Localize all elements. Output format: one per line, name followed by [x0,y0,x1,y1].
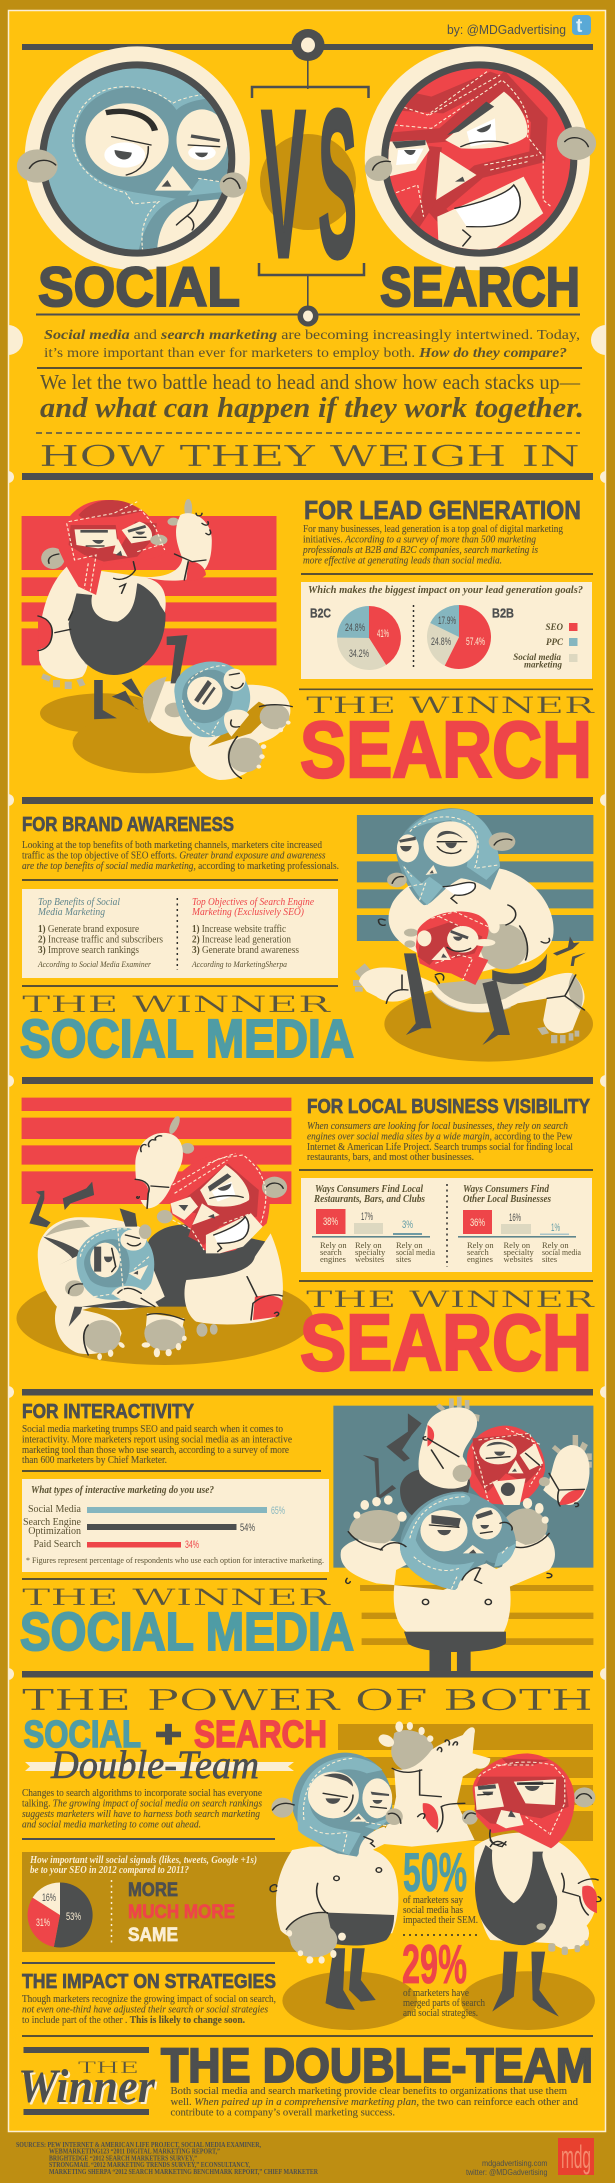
card: bar chart: 65% [271,1505,285,1517]
bar: social media [87,1507,267,1513]
bar: paid search [87,1542,181,1548]
tagline [40,370,584,424]
illustration: interactivity wrestlers [333,1397,593,1672]
chart: other local businesses: search [467,1247,489,1257]
illustration: brand awareness wrestlers [353,808,593,1062]
winner label: THE WINNER [306,1288,597,1313]
pie: B2B [427,605,491,669]
tagline: and what can happen if they work together. [40,392,584,424]
panel: for local business visibility [299,1096,597,1387]
panel: double-team intro [22,1714,327,1840]
chart: other local businesses: Ways Consumers Find [463,1184,550,1195]
section bar [22,797,593,804]
chart: other local businesses: specialty [504,1247,534,1257]
heading: FOR BRAND AWARENESS [22,814,234,836]
chart: other local businesses: engines [467,1254,493,1264]
winner badge: Winner [20,2062,158,2115]
chart: restaurants, bars, clubs: 38% [323,1216,338,1228]
card: bar chart: Paid Search [34,1539,81,1550]
column: search objectives: According to MarketingSherpa [191,959,287,969]
column: search objectives: Top Objectives of Search Engine [192,897,314,908]
heading: search: SEARCH [380,255,580,318]
chart: restaurants, bars, clubs: websites [355,1254,384,1264]
pie: signals: 31% [36,1917,50,1929]
logo: mdg [558,2138,594,2175]
dotted divider [403,1934,478,1936]
pie: signals [28,1882,93,1947]
illustration: lead generation wrestlers [22,499,292,780]
panel: the winner double-team [18,2040,593,2118]
pie: B2C [337,606,401,670]
body text: talking. The growing impact of social media on search rankings [22,1798,262,1810]
column: search objectives: 2) Increase lead generation [192,934,292,946]
section bar [22,1077,593,1084]
chart: other local businesses: social media [542,1247,581,1257]
body text [307,1121,573,1163]
panel: social signals: be to your SEO in 2012 compared to 2011? [30,1865,189,1876]
icon: twitter [572,15,591,37]
legend: marketing [524,660,562,670]
body text: restaurants, bars, and most other businesses. [307,1152,474,1163]
panel: for lead generation [299,495,597,794]
chart: other local businesses: Rely on [542,1240,569,1250]
card: bar chart: * Figures represent percentage of respondents who use each option for interactive marketing. [26,1556,324,1565]
chart: other local businesses: Rely on [467,1240,494,1250]
card: benefits and objectives [22,889,338,978]
chart: restaurants, bars, clubs: engines [320,1254,346,1264]
panel: social signals [22,1852,297,1952]
column: social benefits: 1) Generate brand exposure [38,924,139,935]
VS mark: V [261,65,306,302]
card: pie charts: B2C [310,606,331,620]
card: pie charts: B2B [492,606,514,620]
pie: B2B: 17.9% [438,615,456,627]
stat: 50 percent: of marketers say [403,1895,464,1906]
body text: are the top benefits of social media marketing, according to marketing professionals. [22,861,339,872]
winner label: THE WINNER [306,694,597,719]
chart: restaurants, bars, clubs: 17% [361,1211,373,1223]
body text [22,1994,276,2026]
chart: restaurants, bars, clubs: Rely on [355,1240,382,1250]
section bar [22,473,593,480]
chart: restaurants, bars, clubs: Restaurants, Bars, and Clubs [313,1194,425,1205]
panel: for interactivity [20,1401,354,1662]
column: social benefits: According to Social Media Examiner [37,959,152,969]
column: social benefits: Media Marketing [37,907,105,918]
card: bar chart: Optimization [28,1526,81,1537]
winner badge: Winner [18,2060,156,2113]
heading: social plus search: + [155,1714,182,1756]
column: social benefits: 2) Increase traffic and subscribers [38,934,163,946]
body text: Changes to search algorithms to incorporate social has everyone [22,1788,262,1799]
pie: B2C: 34.2% [349,648,369,660]
column: search objectives: Marketing (Exclusively SEO) [191,907,304,918]
legend: much more: MUCH MORE [128,1902,235,1923]
stat: 29 percent [402,1933,486,2019]
chart: other local businesses: 1% [551,1222,560,1234]
chart: restaurants, bars, clubs: specialty [355,1247,386,1257]
footer: contact: mdgadvertising.com [482,2158,548,2168]
chart: restaurants, bars, clubs: sites [396,1254,411,1264]
winner badge: THE [78,2058,139,2077]
section bar [22,1389,593,1396]
body text: traffic as the top objective of SEO efforts. Greater brand exposure and awareness [22,850,326,862]
winner name: SOCIAL MEDIA [20,1602,354,1662]
footer: contact [466,2158,548,2177]
body text: engines over social media sites by a wide margin, according to the Pew [307,1132,573,1142]
chart: restaurants, bars, clubs [312,1184,435,1264]
chart: other local businesses [458,1184,581,1264]
panel: impact on strategies [22,1962,276,2026]
card: pie charts: Which makes the biggest impact on your lead generation goals? [308,584,583,596]
heading: social plus search: SEARCH [194,1714,327,1756]
intro paragraph: it’s more important than ever for marketers to employ both. How do they compare? [44,346,567,361]
winner label: THE WINNER [22,1586,333,1611]
pie: B2C: 41% [377,628,389,640]
body text: than 600 marketers by Chief Marketer. [22,1455,167,1466]
column: social benefits: 3) Improve search rankings [38,945,139,956]
footer: sources: SOURCES: PEW INTERNET & AMERICAN LIFE PROJECT, SOCIAL MEDIA EXAMINER, [16,2141,261,2149]
dashed divider [36,432,580,434]
legend: SEO [545,622,563,632]
portrait: search wrestler [365,46,596,270]
chart: other local businesses: sites [542,1254,557,1264]
stat: 29 percent: merged parts of search [403,1998,486,2009]
pie: B2B: 24.8% [431,636,451,648]
card: bar chart: Search Engine [23,1517,82,1528]
column: search objectives: 1) Increase website traffic [192,924,286,935]
heading: THE DOUBLE-TEAM [161,2040,593,2093]
chart: restaurants, bars, clubs: Rely on [396,1240,423,1250]
bullet ornament bottom [36,275,580,326]
text: S [318,65,357,302]
script title: Double-Team [50,1742,259,1787]
footer: sources: WEBMARKETING123 “2011 DIGITAL MARKETING REPORT,” [49,2148,220,2156]
legend: same: SAME [128,1925,178,1946]
column: search objectives: 3) Generate brand awareness [192,945,299,956]
legend: Social media [513,652,561,662]
stripes: power of both [338,1724,593,1841]
legend [513,622,578,670]
footer: sources: MARKETING SHERPA “2012 SEARCH MARKETING BENCHMARK REPORT,” CHIEF MARKETER [49,2168,319,2176]
illustration: double-team wrestlers [270,1721,601,2030]
portrait: social wrestler [17,46,250,270]
footer: sources: STRONGMAIL “2012 MARKETING TRENDS SURVEY,” ECONSULTANCY, [49,2161,250,2169]
chart: restaurants, bars, clubs: Ways Consumers Find Local [315,1184,423,1195]
chart: other local businesses: 16% [509,1212,521,1224]
heading: how they weigh in: HOW THEY WEIGH IN [39,439,580,473]
body text: Social media marketing trumps SEO and paid search when it comes to [22,1424,283,1435]
body text [170,2086,579,2118]
body text [22,1424,292,1466]
card: bar chart: 34% [185,1539,199,1551]
heading: the power of both: THE POWER OF BOTH [22,1683,593,1717]
footer: sources [16,2141,319,2176]
body text: marketing tool than those who use search, according to a survey of more [22,1445,289,1456]
footer: sources: BRIGHTEDGE “2012 SEARCH MARKETERS SURVEY,” [49,2154,197,2162]
pie: signals: 16% [42,1892,56,1904]
stat: 50 percent: social media has [403,1905,463,1916]
column: social benefits: Top Benefits of Social [38,897,120,908]
card: pie charts [301,582,592,679]
chart: other local businesses: websites [504,1254,533,1264]
intro paragraph: Social media and search marketing are becoming increasingly intertwined. Today, [44,328,580,343]
body text: more effective at generating leads than social media. [303,556,502,566]
body text: Both social media and search marketing provide clear benefits to organizations that use them [170,2086,567,2097]
intro paragraph [44,328,580,361]
body text: suggests marketers will have to harness both search marketing [22,1809,260,1820]
body text: When consumers are looking for local businesses, they rely on search [307,1121,568,1132]
illustration: local business wrestlers [16,1098,313,1365]
body text: not even one-third have adjusted their search or social strategies [22,2004,268,2016]
pie: B2C: 24.8% [345,622,365,634]
divider [37,367,582,369]
column: search objectives [191,897,314,969]
byline: by: @MDGadvertising [447,22,566,37]
card: bar chart [22,1479,329,1572]
body text: contribute to a company’s overall marketing success. [170,2108,395,2118]
panel: for brand awareness [20,814,354,1069]
bullet ornament top [292,29,324,89]
divider [22,2035,593,2037]
chart: other local businesses: Rely on [504,1240,531,1250]
body text: well. When paired up in a comprehensive marketing plan, the two can reinforce each other and [170,2097,579,2108]
heading: FOR INTERACTIVITY [22,1401,195,1423]
legend: more: MORE [128,1880,178,1901]
section bar [22,1671,593,1678]
body text: For many businesses, lead generation is a top goal of digital marketing [303,524,564,535]
body text [22,840,339,872]
body text: professionals at B2B and B2C companies, search marketing is [302,545,538,556]
body text: initiatives. According to a survey of more than 500 marketing [303,534,536,546]
stat: 50 percent: impacted their SEM. [403,1915,478,1926]
chart: other local businesses: 36% [470,1217,485,1229]
winner name: SOCIAL MEDIA [20,1009,354,1069]
icon: twitter: t [576,16,583,37]
winner label: THE WINNER [22,993,333,1018]
chart: restaurants, bars, clubs: social media [396,1247,435,1257]
body text: to include part of the other . This is likely to change soon. [22,2015,245,2026]
edge notches [0,325,615,1680]
heading: THE IMPACT ON STRATEGIES [22,1971,276,1993]
footer: contact: twitter: @MDGadvertising [466,2167,548,2177]
dotted divider [412,605,414,668]
stat: 29 percent: and social strategies. [403,2008,478,2019]
bar: SEO [87,1524,236,1530]
legend: PPC [546,637,564,647]
stat: 29 percent: 29% [402,1933,467,1995]
body text: Though marketers recognize the growing impact of social on search, [22,1994,276,2005]
stat: 50 percent [403,1841,478,1926]
heading: FOR LEAD GENERATION [304,495,581,525]
stat: 50 percent: 50% [403,1841,467,1903]
card: bar charts [301,1178,592,1272]
heading: social plus search: SOCIAL [24,1714,141,1756]
body text: interactivity. More marketers report using social media as an interactive [22,1434,292,1446]
tagline: We let the two battle head to head and show how each stacks up— [40,370,581,394]
pie: B2B: 57.4% [466,636,485,648]
chart: restaurants, bars, clubs: search [320,1247,342,1257]
ribbon [25,1762,294,1771]
card: bar chart: What types of interactive marketing do you use? [31,1485,214,1496]
heading: social: SOCIAL [38,255,240,318]
chart: restaurants, bars, clubs: 3% [402,1219,413,1231]
body text: Internet & American Life Project. Search trumps social for finding local [307,1142,573,1153]
body text: Looking at the top benefits of both marketing channels, marketers cite increased [22,840,323,851]
body text: and social media marketing to come out ahead. [22,1820,201,1830]
pie: signals: 53% [66,1911,81,1923]
column: social benefits [37,897,163,969]
body text [22,1788,262,1830]
chart: other local businesses: Other Local Businesses [463,1194,551,1205]
card: bar chart: 54% [240,1522,255,1534]
stat: 29 percent: of marketers have [403,1988,469,1999]
panel: social signals: How important will social signals (likes, tweets, Google +1s) [29,1855,257,1866]
chart: restaurants, bars, clubs: Rely on [320,1240,347,1250]
body text [302,524,564,566]
card: bar chart: Social Media [28,1504,82,1515]
heading: social plus search [24,1714,327,1756]
header rule [22,44,593,50]
